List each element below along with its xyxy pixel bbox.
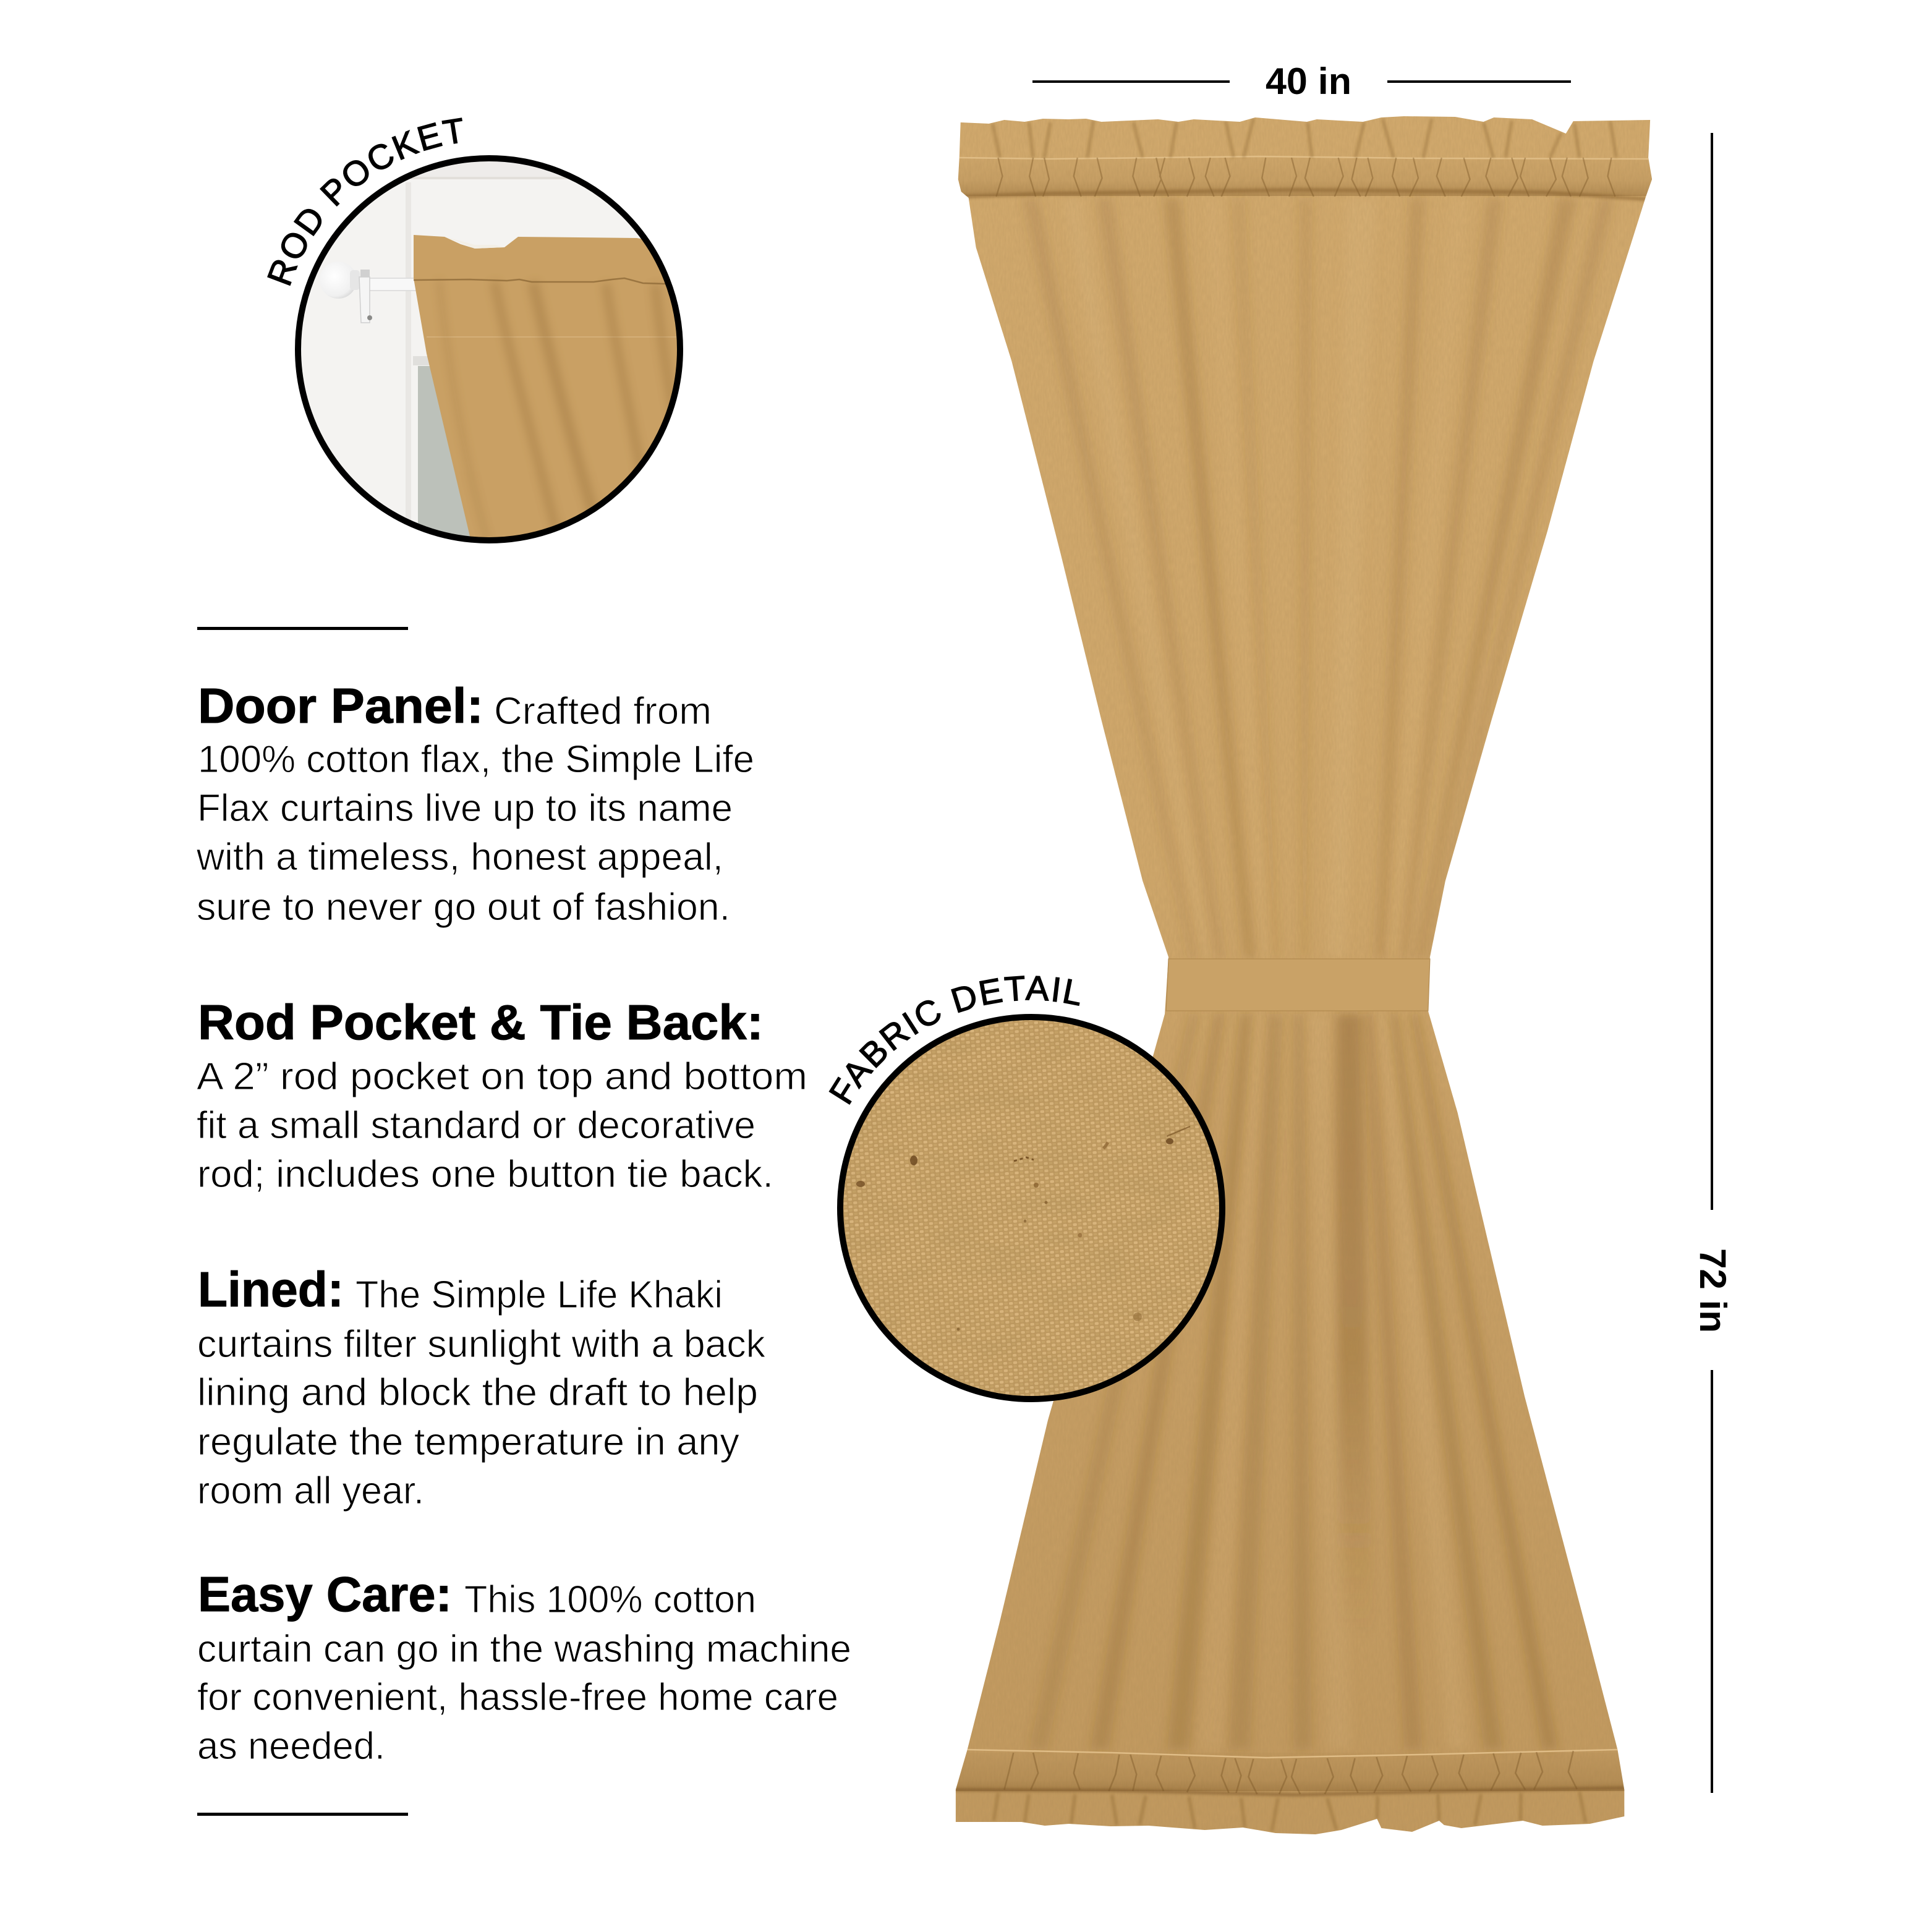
linen texture <box>971 120 1635 1828</box>
text block: door panel: sure to never go out of fashion. <box>197 886 730 929</box>
ruffle folds <box>994 1792 1586 1831</box>
width dimension: 40 in: 40 in <box>1266 61 1351 102</box>
lower pleats <box>1029 1014 1558 1750</box>
text block: door panel: 100% cotton flax, the Simple Life <box>198 738 754 781</box>
text block: rod pocket and tie back: rod; includes one button tie back. <box>197 1153 773 1196</box>
callout: fabric detail <box>828 976 1225 1402</box>
bottom rule <box>197 1813 408 1816</box>
curtain door panel <box>927 93 1696 1855</box>
text block: lined: room all year. <box>197 1470 424 1512</box>
text block: door panel: Flax curtains live up to its name <box>197 787 733 830</box>
text block: easy care: This 100% cotton <box>464 1578 756 1621</box>
text block: lined: The Simple Life Khaki <box>355 1274 723 1316</box>
fabric swatch <box>835 1014 1230 1410</box>
rod pocket photo <box>291 155 692 553</box>
width dimension: 40 in <box>1032 61 1571 102</box>
circle border <box>840 1017 1222 1399</box>
curtain rod <box>320 262 417 323</box>
text block: door panel: Crafted from <box>494 690 712 733</box>
curved label <box>289 142 467 288</box>
heading: rod pocket and tie back: Rod Pocket & Tie Back: <box>198 995 764 1050</box>
callout: fabric detail: FABRIC DETAIL <box>828 976 1080 1105</box>
tie back band <box>1166 959 1430 1011</box>
heading: easy care: Easy Care: <box>198 1567 452 1622</box>
text block: lined: regulate the temperature in any <box>197 1421 739 1463</box>
upper highlights <box>1063 198 1469 958</box>
text block: easy care <box>197 1567 851 1768</box>
lower highlights <box>1198 1014 1469 1750</box>
text block: lined: lining and block the draft to help <box>197 1371 758 1414</box>
text block: rod pocket and tie back <box>197 995 807 1196</box>
header folds <box>992 119 1616 158</box>
text block: rod pocket and tie back: fit a small standard or decorative <box>197 1104 755 1147</box>
callout: rod pocket <box>267 117 683 543</box>
text block: rod pocket and tie back: A 2” rod pocket on top and bottom <box>197 1055 807 1098</box>
top rod pocket <box>952 119 1659 199</box>
text block: lined <box>197 1262 766 1512</box>
callout: rod pocket: ROD POCKET <box>267 117 462 286</box>
lower central shadow <box>1337 1014 1373 1638</box>
height dimension: 72 in: 72 in <box>1692 1248 1734 1333</box>
text block: easy care: as needed. <box>197 1725 385 1768</box>
top rule <box>197 627 408 630</box>
pucker wrinkles <box>996 158 1615 197</box>
text block: door panel <box>196 678 754 929</box>
curtain top <box>414 235 692 550</box>
text block: lined: curtains filter sunlight with a back <box>197 1323 766 1366</box>
heading: lined: Lined: <box>198 1262 344 1317</box>
pucker wrinkles <box>1004 1751 1577 1794</box>
heading: door panel: Door Panel: <box>198 678 483 733</box>
text block: door panel: with a timeless, honest appeal, <box>196 836 723 879</box>
text block: easy care: for convenient, hassle-free home care <box>197 1676 838 1719</box>
text block: easy care: curtain can go in the washing machine <box>197 1628 851 1670</box>
curtain base cloth <box>956 116 1652 1834</box>
upper pleats <box>1023 198 1614 958</box>
bottom rod pocket <box>952 1750 1628 1831</box>
circle border <box>298 158 680 540</box>
height dimension: 72 in <box>1692 133 1734 1793</box>
curved label <box>848 1000 1087 1107</box>
